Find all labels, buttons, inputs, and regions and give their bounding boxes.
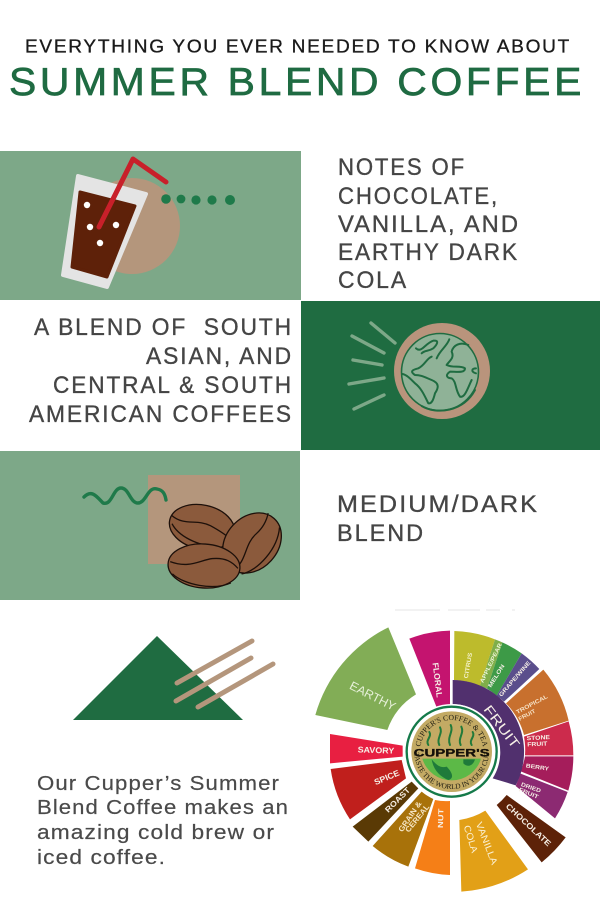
subtitle: EVERYTHING YOU EVER NEEDED TO KNOW ABOUT: [25, 36, 571, 56]
segment: fruit family: GRAPE/WINE: [498, 660, 533, 698]
segment: roast: ROAST: [383, 786, 412, 814]
segment: fruit family: FRUIT: [518, 708, 537, 723]
text: flavor notes: VANILLA, AND: [338, 211, 520, 238]
text: origin: ASIAN, AND: [146, 343, 293, 370]
text: cold brew note: [37, 772, 289, 869]
text: cold brew note: amazing cold brew or: [37, 821, 275, 844]
icon: dots: [161, 194, 235, 205]
icon: globe: [394, 323, 490, 419]
panel background: [0, 151, 301, 300]
text: flavor notes: EARTHY DARK: [338, 239, 519, 266]
segment: earthy: [315, 627, 416, 730]
icon: square: [148, 475, 240, 564]
panel: flavor notes: [0, 151, 520, 300]
segment: vanilla cola: [459, 811, 528, 892]
segment: fruit family: STONE: [527, 735, 550, 742]
logo: Cupper's: TASTE THE WORLD IN YOUR CUP: [414, 752, 489, 789]
header: [9, 36, 585, 104]
panel: origin: [29, 301, 600, 450]
segment: fruit family: CITRUS: [464, 652, 474, 679]
text: origin: [29, 314, 293, 428]
segment: fruit family: FRUIT: [481, 702, 523, 751]
segment: spice: [331, 760, 406, 819]
icon: squiggle: [84, 488, 166, 503]
logo: Cupper's: CUPPER'S COFFEE & TEA: [416, 714, 488, 747]
segment: nut: [415, 800, 450, 875]
logo: Cupper's: CUPPER'S: [414, 748, 490, 760]
segment: savory: SAVORY: [358, 744, 395, 756]
segment: floral: FLORAL: [431, 662, 445, 698]
text: flavor notes: COLA: [338, 267, 408, 294]
logo: Cupper's: [406, 704, 498, 798]
text: roast: BLEND: [337, 520, 425, 547]
text: cold brew note: Blend Coffee makes an: [37, 796, 289, 819]
segment: chocolate: [497, 795, 566, 862]
segment: fruit family: FRUIT: [527, 741, 548, 749]
panel background: [301, 301, 600, 450]
panel background: [0, 451, 300, 600]
segment: vanilla cola: COLA: [462, 824, 480, 855]
icon: triangle with lines: [73, 636, 273, 720]
text: cold brew note: Our Cupper’s Summer: [37, 772, 280, 795]
text: flavor notes: [338, 154, 520, 294]
chart: flavor wheel: [315, 627, 574, 892]
segment: spice: SPICE: [372, 767, 401, 787]
text: flavor notes: NOTES OF: [338, 154, 466, 181]
segment: grain and cereal: [373, 792, 433, 867]
segment: roast: [353, 782, 418, 842]
segment: fruit family: BERRY: [525, 763, 550, 773]
text: origin: AMERICAN COFFEES: [29, 401, 293, 428]
text: roast: [337, 491, 539, 547]
icon: iced coffee: [63, 159, 180, 287]
text: origin: A BLEND OF SOUTH: [34, 314, 293, 341]
segment: nut: NUT: [436, 808, 446, 828]
panel: roast: [0, 451, 539, 600]
segment: earthy: EARTHY: [347, 678, 398, 714]
segment: savory: [330, 734, 403, 763]
segment: chocolate: CHOCOLATE: [504, 802, 553, 849]
segment: grain and cereal: CEREAL: [403, 802, 432, 834]
icon: rays: [349, 323, 395, 409]
segment: fruit family: APPLE/PEAR: [479, 643, 504, 684]
segment: grain and cereal: GRAIN &: [396, 799, 424, 834]
segment: floral: [409, 631, 450, 707]
segment: fruit family: MELON: [488, 664, 506, 689]
segment: fruit family: DRIED: [520, 782, 541, 795]
segment: fruit family: [453, 631, 573, 818]
text: cold brew note: iced coffee.: [37, 846, 166, 869]
segment: vanilla cola: VANILLA: [474, 821, 500, 867]
text: origin: CENTRAL & SOUTH: [53, 372, 293, 399]
text: roast: MEDIUM/DARK: [337, 491, 539, 518]
icon: coffee beans: [165, 499, 293, 590]
title: SUMMER BLEND COFFEE: [9, 61, 585, 104]
segment: fruit family: FRUIT: [518, 787, 540, 801]
segment: fruit family: TROPICAL: [515, 694, 550, 716]
text: flavor notes: CHOCOLATE,: [338, 183, 499, 210]
